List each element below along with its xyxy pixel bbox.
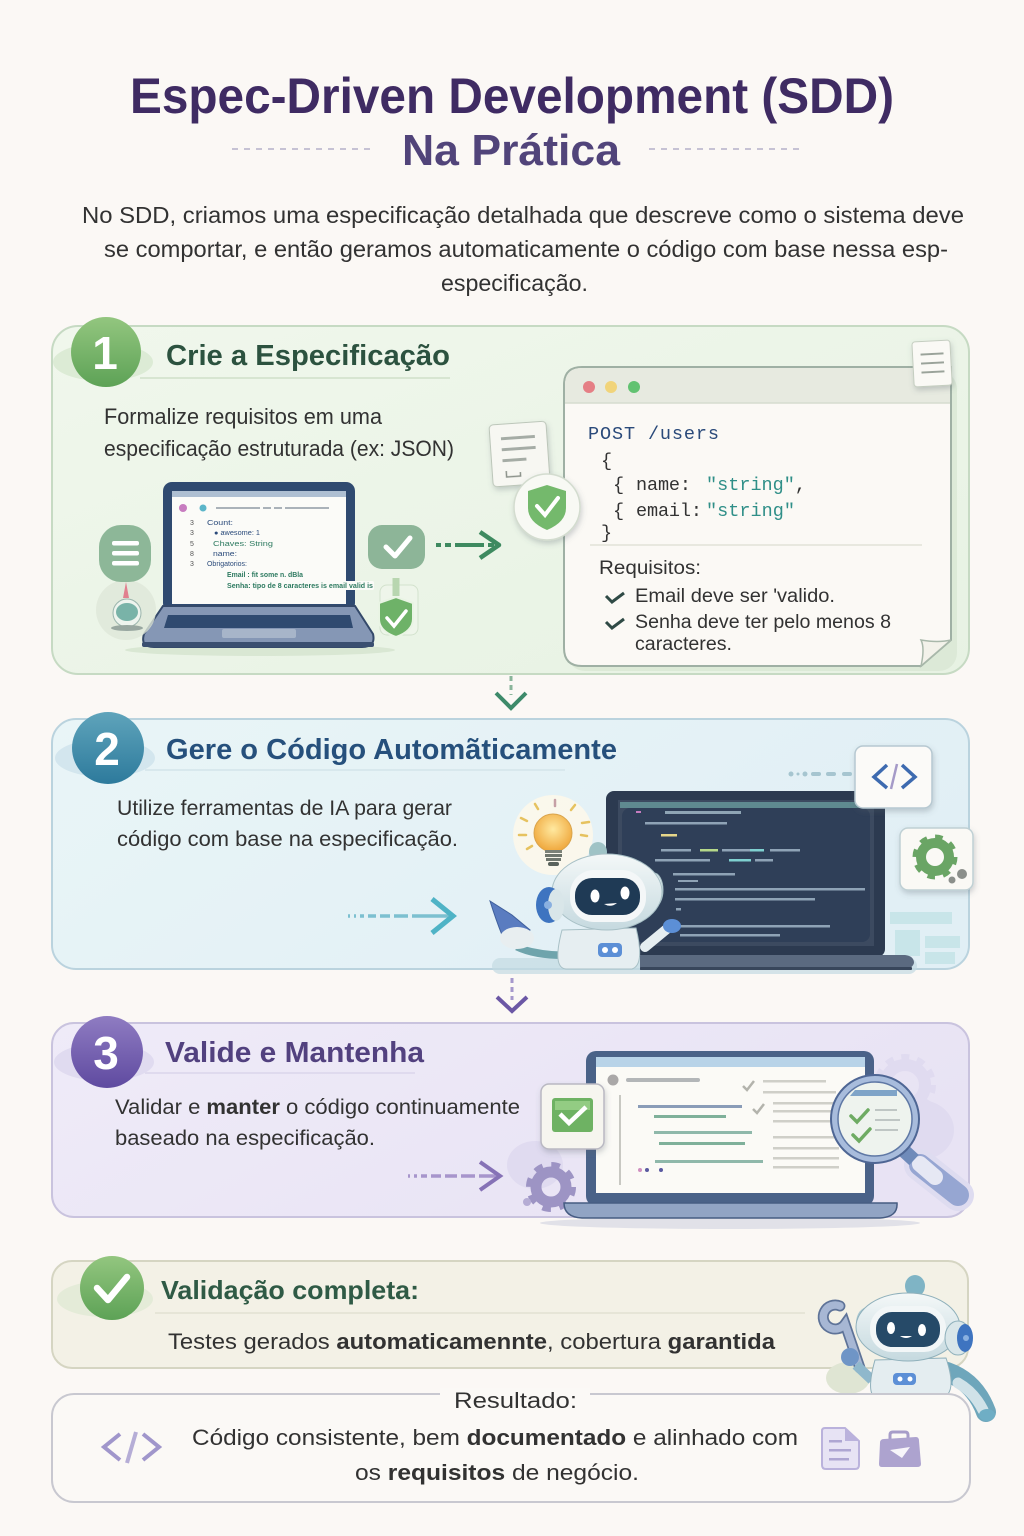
illustration: background data blocks <box>890 912 960 964</box>
step 1 number badge <box>53 317 153 387</box>
icon: check badge <box>57 1256 153 1320</box>
background gears and clouds <box>507 1057 954 1189</box>
panel: step 2 <box>52 712 973 974</box>
illustration: code laptop <box>492 791 917 974</box>
icon: note on window corner <box>912 340 952 387</box>
code sample: POST /users <box>588 424 719 445</box>
code listing: Obrigatorios: <box>207 561 247 568</box>
panel: step 3 <box>52 1016 969 1229</box>
icon: code symbol <box>104 1432 159 1463</box>
title: Espec-Driven Development (SDD) <box>130 68 894 124</box>
code listing: Senha: tipo de 8 caracteres is email valid is <box>227 583 373 590</box>
illustration: validation laptop <box>540 1051 920 1229</box>
code sample: { <box>613 501 624 522</box>
icon: document with shield <box>489 421 580 540</box>
specification window <box>564 367 957 671</box>
code sample: "string", <box>706 475 806 496</box>
code sample: { <box>613 475 624 496</box>
icon: code tile <box>855 746 932 808</box>
code listing: 3 <box>190 561 194 568</box>
illustration: robot assistant <box>490 842 681 969</box>
arrow: to laptop <box>408 1162 500 1190</box>
validation heading: Validação completa: <box>161 1275 419 1305</box>
step 3 number badge <box>54 1016 154 1088</box>
icon: check tile <box>541 1084 604 1149</box>
intro text: especificação. <box>441 270 588 296</box>
requirements list: Requisitos: <box>599 557 701 579</box>
document rules <box>763 1080 839 1168</box>
step 1 heading: Crie a Especificação <box>166 340 450 372</box>
title <box>130 68 894 175</box>
code listing <box>190 520 374 590</box>
icon: briefcase <box>879 1432 921 1467</box>
decorative connection dots <box>788 772 852 776</box>
step 1 number badge: 1 <box>92 327 118 379</box>
intro text <box>82 202 964 296</box>
code listing: 8 <box>190 551 194 558</box>
step 3 description: Validar e manter o código continuamente <box>115 1095 520 1119</box>
step 3 number badge: 3 <box>93 1027 119 1079</box>
illustration: laptop with specification <box>125 482 395 656</box>
window controls <box>583 381 640 393</box>
arrow: laptop to specification <box>436 532 499 558</box>
arrow: step 2 to step 3 <box>497 978 527 1011</box>
code listing: name: <box>213 551 237 558</box>
code listing: ● awesome: 1 <box>214 530 260 537</box>
code listing: 5 <box>190 541 194 548</box>
code listing: Chaves: String <box>213 541 273 548</box>
result text: os requisitos de negócio. <box>355 1460 639 1485</box>
requirements list: Senha deve ter pelo menos 8 <box>635 612 891 633</box>
code listing: 3 <box>190 530 194 537</box>
step 1 description: especificação estruturada (ex: JSON) <box>104 436 454 461</box>
title: Na Prática <box>402 126 621 175</box>
step 2 heading: Gere o Código Automãticamente <box>166 734 617 766</box>
step 2 number badge: 2 <box>94 723 120 775</box>
code lines <box>636 811 865 936</box>
code listing: Count: <box>207 520 233 527</box>
step 2 description <box>117 796 458 851</box>
arrow: to laptop <box>348 899 453 933</box>
intro text: No SDD, criamos uma especificação detalhada que descreve como o sistema deve <box>82 202 964 228</box>
step 3 description <box>115 1095 520 1150</box>
code sample <box>588 424 922 545</box>
icon: gear tile <box>900 828 973 890</box>
code listing: Email : fit some n. dBla <box>227 572 303 579</box>
icon: check tile <box>368 525 425 569</box>
step 3 description: baseado na especificação. <box>115 1126 375 1150</box>
arrow: step 1 to step 2 <box>496 676 526 708</box>
code sample: name: <box>636 475 691 496</box>
icon: document <box>822 1428 859 1469</box>
icon: gear <box>523 1165 573 1209</box>
icon: light bulb <box>513 795 593 875</box>
step 2 description: Utilize ferramentas de IA para gerar <box>117 796 452 820</box>
requirements list: Email deve ser 'valido. <box>635 586 835 607</box>
result text <box>192 1425 798 1485</box>
code lines <box>638 1105 763 1172</box>
icon: chat bubble with small robot <box>96 525 156 640</box>
step 1 description: Formalize requisitos em uma <box>104 404 383 429</box>
panel: validation complete <box>52 1256 968 1368</box>
intro text: se comportar, e então geramos automaticamente o código com base nessa esp- <box>104 236 948 262</box>
code sample: "string" <box>706 501 795 522</box>
step 2 description: código com base na especificação. <box>117 827 458 851</box>
step 3 heading: Valide e Mantenha <box>165 1037 425 1069</box>
panel: result <box>52 1388 970 1502</box>
code sample: { <box>601 451 612 472</box>
step 1 description <box>104 404 454 461</box>
result label: Resultado: <box>454 1388 577 1413</box>
icon: magnifier <box>831 1075 958 1195</box>
panel: step 1 <box>52 317 969 674</box>
code sample: } <box>601 523 612 544</box>
code sample: email: <box>636 501 702 522</box>
requirements list: caracteres. <box>635 634 732 655</box>
illustration: robot with wrench <box>823 1275 995 1421</box>
icon: green shield <box>379 578 418 637</box>
step 2 number badge <box>55 712 155 784</box>
result text: Código consistente, bem documentado e alinhado com <box>192 1425 798 1450</box>
requirements list <box>599 557 891 655</box>
code listing: 3 <box>190 520 194 527</box>
validation text: Testes gerados automaticamennte , cobertura garantida <box>168 1329 776 1354</box>
folded page corner <box>921 640 951 666</box>
